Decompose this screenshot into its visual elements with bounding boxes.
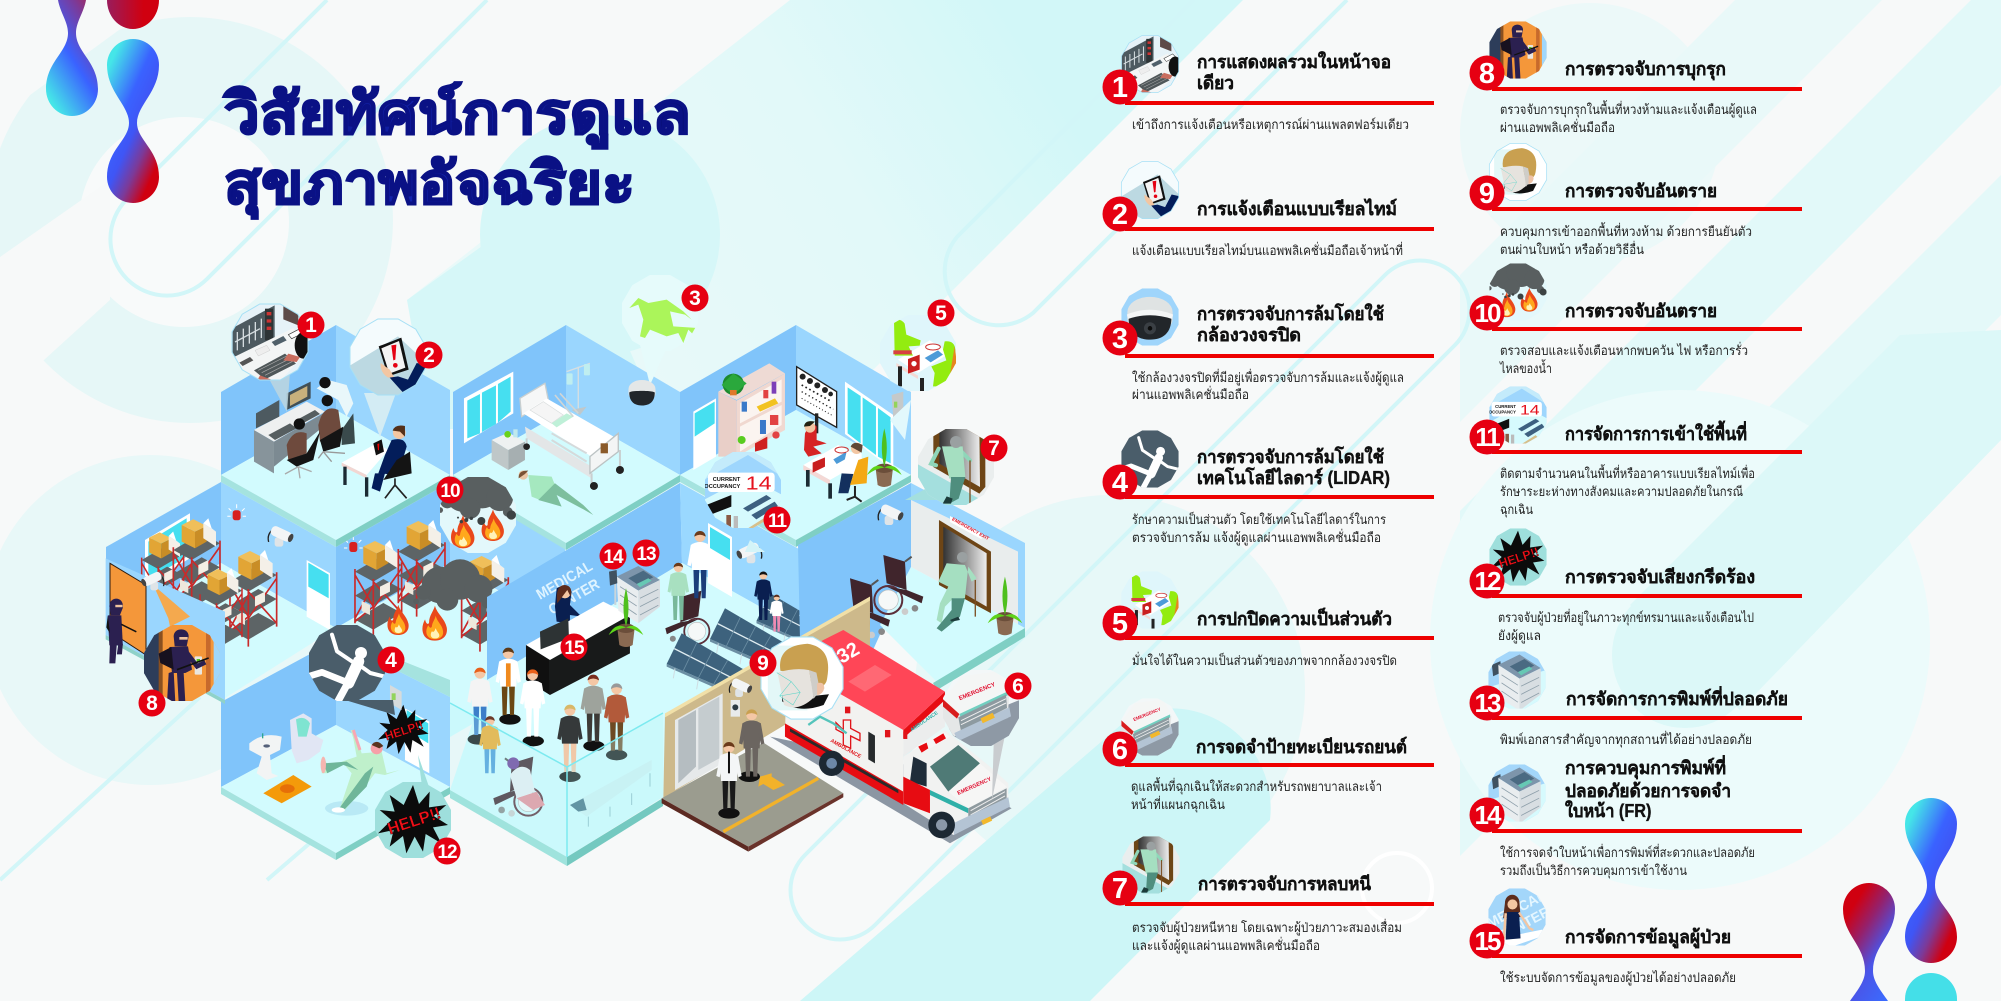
list item 8: ตรวจจับการบุกรุกในพื้นที่หวงห้ามและแจ้งเตือนผู้ดูแล [1500,100,1757,118]
room: warehouse left [106,482,336,698]
list item 13: การจัดการการพิมพ์ที่ปลอดภัย [1566,686,1788,709]
illustration number badges: 4 [385,649,397,672]
decorative blobs: bottom right [1843,798,1957,1001]
bubble tails [268,345,1010,810]
list item 3: การตรวจจับการล้มโดยใช้ [1197,303,1384,324]
callout 6 [942,669,1020,747]
list item 15: 15 [1475,926,1501,956]
callout 9 [760,636,844,720]
list item 12: การตรวจจับเสียงกรีดร้อง [1565,567,1755,587]
list item 6: 6 [1112,734,1128,766]
ambulance: 32 [833,638,863,668]
list item 7 [1102,835,1434,954]
list item 11 [1470,385,1802,518]
list item 10: ไหลของน้ำ [1499,359,1552,376]
list item 11: รักษาระยะห่างทางสังคมและความปลอดภัยในกรณี [1500,484,1743,499]
illustration number badges: 1 [305,314,317,337]
list item 7: และแจ้งผู้ดูแลผ่านแอพพลิเคชั่นมือถือ [1132,937,1320,954]
room: patient bedroom [453,325,680,550]
list item 6: ดูแลพื้นที่ฉุกเฉินให้สะดวกสำหรับรถพยาบาลและเจ้า [1131,777,1382,795]
list item 8: ผ่านแอพพลิเคชั่นมือถือ [1500,119,1615,135]
list item 4: 4 [1112,467,1128,499]
list item 7: ตรวจจับผู้ป่วยหนีหาย โดยเฉพาะผู้ป่วยภาวะสมองเสื่อม [1132,919,1402,936]
title: สุขภาพอัจฉริยะ [224,152,635,220]
list item 15: ใช้ระบบจัดการข้อมูลของผู้ป่วยได้อย่างปลอดภัย [1500,970,1736,986]
room: control room [221,325,450,547]
list item 10 [1470,258,1802,376]
list item 14: รวมถึงเป็นวิธีการควบคุมการเข้าใช้งาน [1500,861,1687,879]
list item 3: 3 [1112,323,1128,355]
entrance with security guard [662,597,870,852]
room: bathroom [221,630,450,860]
illustration number badges: 8 [146,692,158,715]
room: warehouse with fire [336,482,600,737]
list item 12: ยังผู้ดูแล [1498,628,1541,644]
illustration number badges: 5 [935,302,947,325]
list item 5: 5 [1112,608,1128,640]
callout 7 [917,428,995,506]
list item 2: แจ้งเตือนแบบเรียลไทม์บนแอพพลิเคชั่นมือถือเจ้าหน้าที่ [1132,242,1403,258]
list item 12: 12 [1475,566,1501,596]
ambulance [770,630,1012,843]
list item 11: ติดตามจำนวนคนในพื้นที่หรืออาคารแบบเรียลไทม์เพื่อ [1500,464,1755,481]
title [223,82,691,220]
list item 8: การตรวจจับการบุกรุก [1565,59,1726,81]
list item 5: มั่นใจได้ในความเป็นส่วนตัวของภาพจากกล้องวงจรปิด [1132,651,1397,668]
list item 15 [1470,887,1802,986]
list item 1: การแสดงผลรวมในหน้าจอ [1197,51,1391,72]
list item 9: ตนผ่านใบหน้า หรือด้วยวิธีอื่น [1500,241,1644,257]
callout 2 [349,318,427,396]
list item 14: ใช้การจดจำใบหน้าเพื่อการพิมพ์ที่สะดวกและปลอดภัย [1500,844,1755,860]
illustration number badges: 2 [423,344,435,367]
list item 14 [1470,755,1802,879]
room: clinic [680,325,911,547]
list item 6 [1102,697,1434,813]
ambulance: AMBULANCE [829,738,862,760]
list item 7: การตรวจจับการหลบหนี [1198,874,1372,894]
callout 5 [879,314,957,393]
list item 7: 7 [1112,873,1128,905]
list item 14: ปลอดภัยด้วยการจดจำ [1565,781,1731,801]
title: วิสัยทัศน์การดูแล [223,82,691,149]
list item 3: ผ่านแอพพลิเคชั่นมือถือ [1132,386,1249,402]
callout 11 [704,451,782,529]
illustration number badges: 6 [1012,675,1024,698]
list item 4: รักษาความเป็นส่วนตัว โดยใช้เทคโนโลยีไลดาร์ในการ [1132,510,1386,527]
isometric building illustration [106,274,1032,866]
list item 9: 9 [1479,178,1495,210]
list item 5 [1102,570,1434,668]
list item 4: เทคโนโลยีไลดาร์ (LIDAR) [1197,467,1390,488]
room: medical center lobby: MEDICAL [534,558,596,603]
list item 1 [1102,34,1434,133]
illustration number badges: 14 [603,547,624,568]
ambulance: EMERGENCY [957,776,993,797]
room: emergency exit corridor: EMERGENCY EXIT [951,516,990,541]
list item 3 [1102,287,1434,402]
list item 10: ตรวจสอบและแจ้งเตือนหากพบควัน ไฟ หรือการรั่ว [1500,342,1748,358]
list item 6: หน้าที่แผนกฉุกเฉิน [1131,796,1225,813]
callout 1 [231,303,312,381]
decorative blobs: top left [46,0,159,203]
list item 4: การตรวจจับการล้มโดยใช้ [1197,446,1384,467]
list item 3: ใช้กล้องวงจรปิดที่มีอยู่เพื่อตรวจจับการล้มและแจ้งผู้ดูแล [1132,369,1404,386]
list item 3: กล้องวงจรปิด [1197,325,1301,345]
list item 12: ตรวจจับผู้ป่วยที่อยู่ในภาวะทุกข์ทรมานและแจ้งเตือนไป [1498,609,1754,626]
room: emergency exit corridor [798,483,1025,690]
illustration number badges: 10 [440,481,460,502]
room: medical center lobby [450,483,873,866]
list item 2: การแจ้งเตือนแบบเรียลไทม์ [1197,198,1397,219]
list item 2: 2 [1112,199,1128,231]
callout 10 [437,470,517,554]
illustration number badges: 7 [988,437,1000,460]
list item 14: 14 [1475,800,1502,830]
list item 10: 10 [1475,298,1501,328]
list item 5: การปกปิดความเป็นส่วนตัว [1197,607,1392,629]
list item 8: 8 [1479,58,1495,90]
list item 1: เข้าถึงการแจ้งเตือนหรือเหตุการณ์ผ่านแพลตฟอร์มเดียว [1132,117,1409,133]
list item 1: 1 [1112,72,1128,104]
illustration number badges: 9 [757,652,769,675]
callout 12 [374,781,452,859]
list item 11: การจัดการการเข้าใช้พื้นที่ [1565,420,1747,444]
list item 9: การตรวจจับอันตราย [1565,181,1717,201]
list item 9: ควบคุมการเข้าออกพื้นที่หวงห้าม ด้วยการยืนยันตัว [1500,222,1752,240]
list item 2 [1102,160,1434,258]
list item 11: 11 [1475,422,1500,452]
list item 13: 13 [1475,688,1501,718]
list item 6: การจดจำป้ายทะเบียนรถยนต์ [1196,736,1407,757]
list item 1: เดียว [1197,73,1234,93]
callout 8 [143,624,221,702]
ambulance: AMBULANCE [909,710,940,733]
list item 15: การจัดการข้อมูลผู้ป่วย [1565,927,1731,949]
illustration number badges: 12 [437,842,457,863]
list item 8 [1470,20,1802,135]
list item 13 [1470,650,1802,748]
list item 4: ตรวจจับการล้ม แจ้งผู้ดูแลผ่านแอพพลิเคชั่นมือถือ [1132,529,1381,546]
list item 14: การควบคุมการพิมพ์ที่ [1565,755,1726,780]
callout 4 [308,624,386,703]
list item 14: ใบหน้า (FR) [1565,800,1652,821]
callout 3 with dome camera [621,274,699,406]
illustration number badges: 11 [768,511,787,532]
list item 10: การตรวจจับอันตราย [1565,301,1717,321]
illustration number badges [138,284,1032,864]
list item 12 [1470,527,1802,644]
illustration number badges: 15 [564,638,585,659]
front-left room wall with intruder door [106,558,225,704]
room: medical center lobby: CENTER [546,576,603,618]
list item 13: พิมพ์เอกสารสำคัญจากทุกสถานที่ได้อย่างปลอดภัย [1500,731,1752,748]
illustration number badges: 3 [689,287,701,310]
list item 4 [1102,429,1434,546]
illustration number badges: 13 [636,544,656,565]
list item 11: ฉุกเฉิน [1500,502,1533,518]
list item 9 [1470,142,1802,257]
